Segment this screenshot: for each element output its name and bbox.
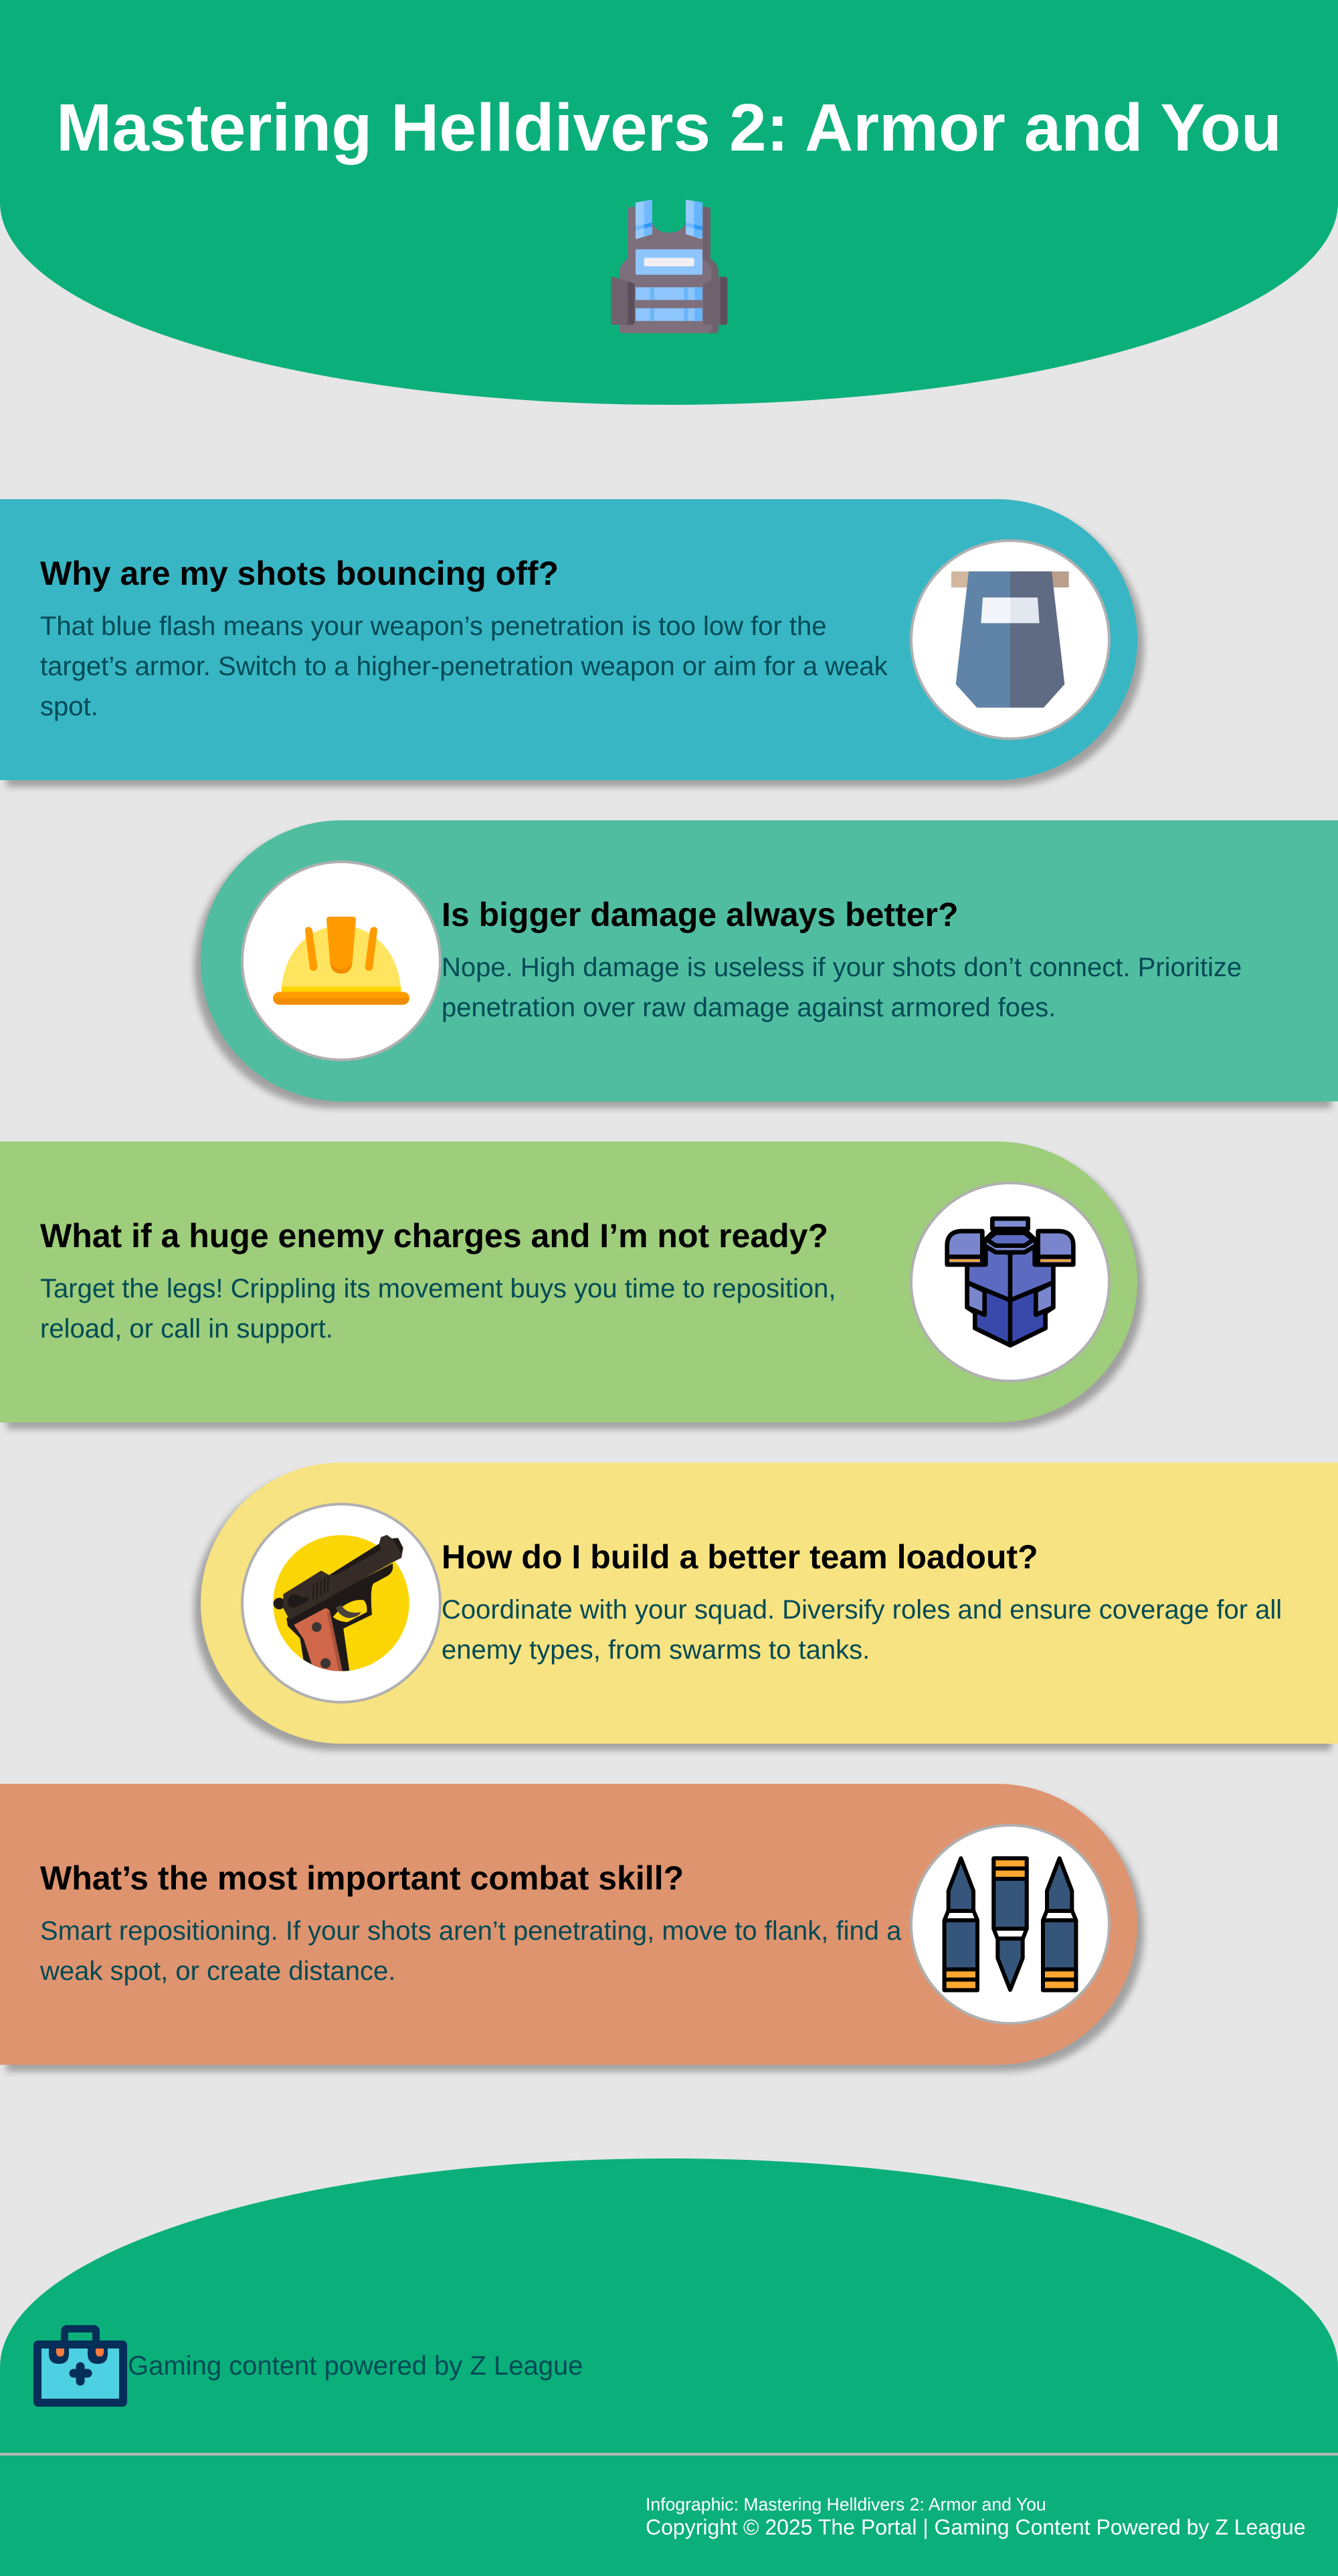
title: Mastering Helldivers 2: Armor and You (56, 90, 1282, 165)
icon: pistol (241, 1503, 442, 1704)
footer divider (0, 2453, 1338, 2456)
text block: Nope. High damage is useless if your shots don’t connect. Prioritize (442, 953, 1242, 982)
copyright line: Copyright © 2025 The Portal | Gaming Content Powered by Z League (646, 2515, 1306, 2539)
text block: That blue flash means your weapon’s penetration is too low for the (40, 612, 827, 641)
text block (40, 1274, 836, 1344)
text block (40, 612, 888, 721)
footer banner (0, 2158, 1338, 2576)
text block: Target the legs! Crippling its movement buys you time to reposition, (40, 1274, 836, 1303)
text block (442, 1595, 1282, 1665)
icon: bullets (910, 1824, 1111, 2025)
icon: armor plate (910, 539, 1111, 740)
panel: better team loadout (201, 1463, 1338, 1744)
icon: body armor (910, 1182, 1111, 1382)
panel: most important combat skill (0, 1784, 1137, 2065)
text block: reload, or call in support. (40, 1314, 333, 1344)
text block: Smart repositioning. If your shots aren’t penetrating, move to flank, find a (40, 1916, 901, 1946)
powered by text: Gaming content powered by Z League (128, 2351, 583, 2381)
text block: penetration over raw damage against armored foes. (442, 993, 1056, 1022)
heading: Is bigger damage always better? (442, 896, 958, 933)
panel: huge enemy charges (0, 1141, 1137, 1422)
icon: hard hat (241, 860, 442, 1061)
text block: target’s armor. Switch to a higher-penetration weapon or aim for a weak (40, 652, 888, 681)
text block (40, 1916, 902, 1986)
icon: tactical vest (611, 199, 728, 333)
infographic title line: Infographic: Mastering Helldivers 2: Armor and You (646, 2494, 1046, 2514)
text block: weak spot, or create distance. (40, 1956, 395, 1986)
header banner (0, 0, 1338, 405)
text block (442, 953, 1242, 1022)
footer credits (646, 2494, 1306, 2539)
heading: What if a huge enemy charges and I’m not ready? (40, 1217, 828, 1255)
panel: why are my shots bouncing off (0, 499, 1137, 780)
text block: Coordinate with your squad. Diversify roles and ensure coverage for all (442, 1595, 1282, 1625)
heading: How do I build a better team loadout? (442, 1538, 1038, 1576)
icon: medical bag (33, 2325, 127, 2407)
text block: enemy types, from swarms to tanks. (442, 1635, 870, 1665)
text block: spot. (40, 692, 98, 721)
panel: is bigger damage always better (201, 820, 1338, 1101)
heading: What’s the most important combat skill? (40, 1859, 684, 1897)
heading: Why are my shots bouncing off? (40, 555, 559, 592)
